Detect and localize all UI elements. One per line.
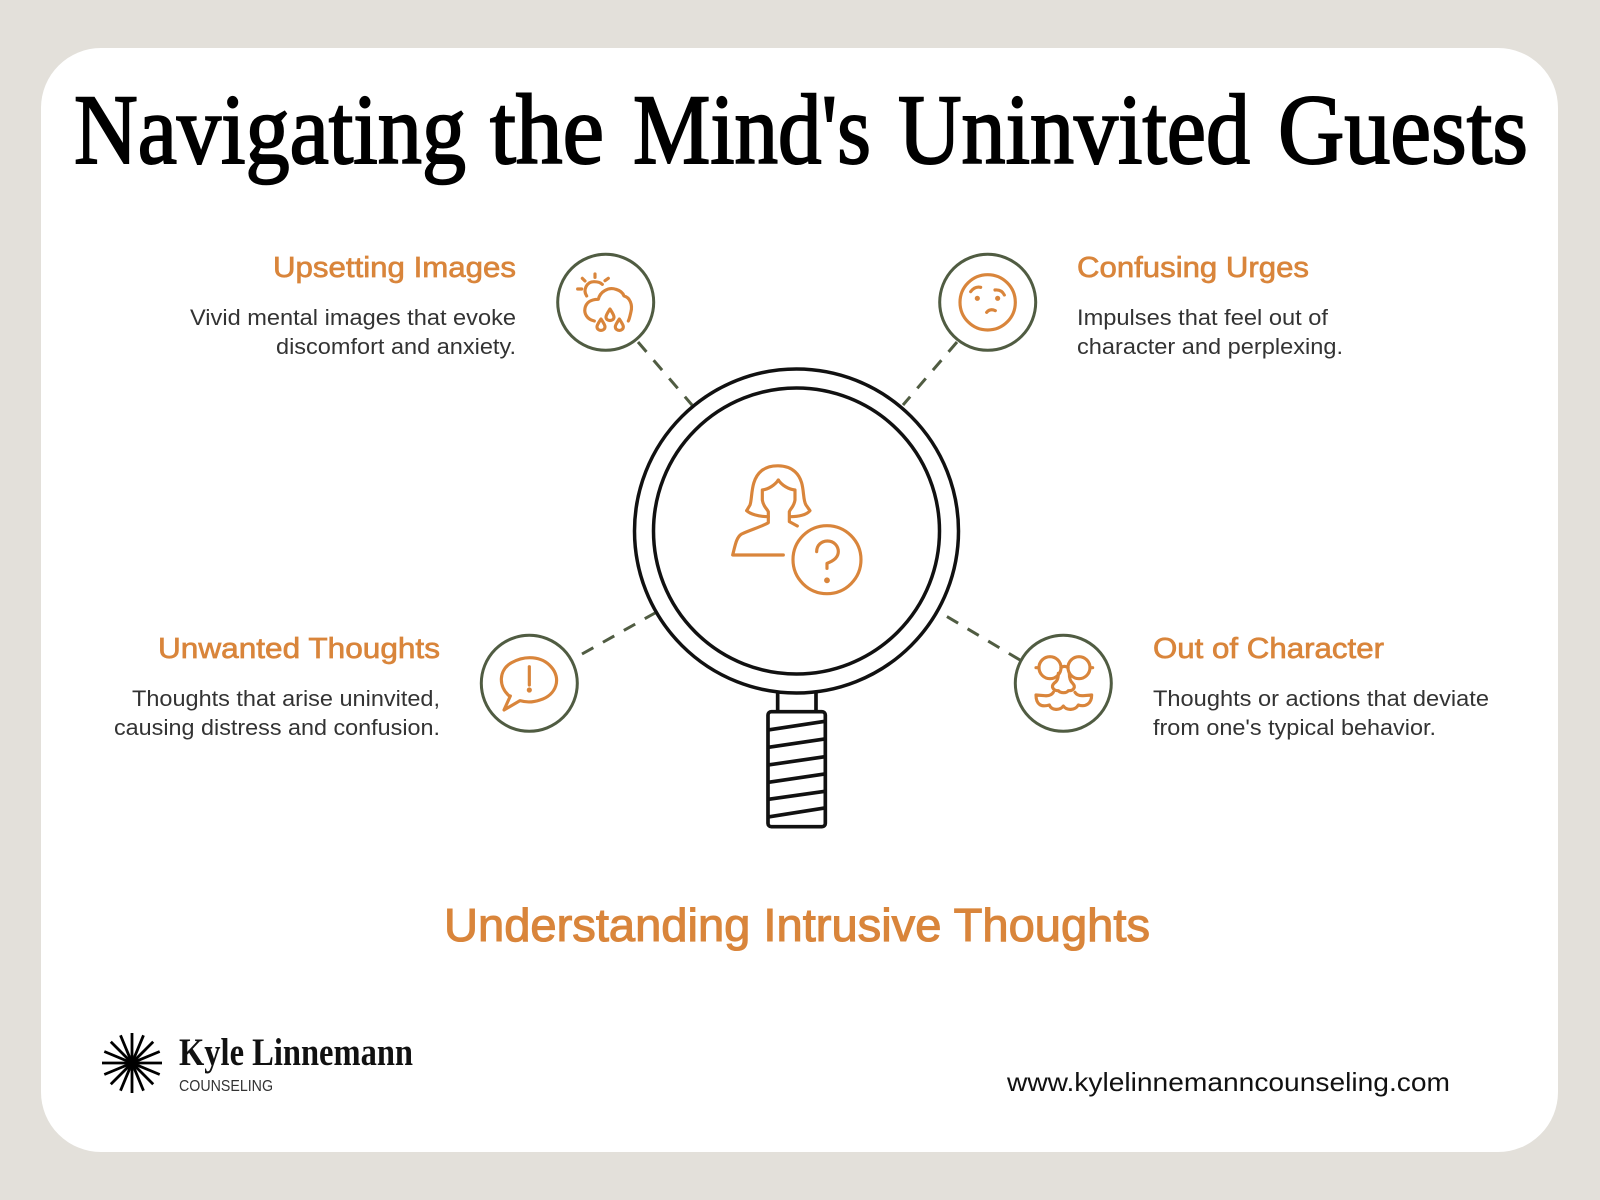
icon: confused face bbox=[940, 254, 1036, 350]
text: logo name: Kyle Linnemann bbox=[179, 1031, 413, 1074]
icon: sunburst bbox=[102, 1033, 162, 1093]
title: the bbox=[490, 74, 604, 185]
connector lines bbox=[582, 342, 1020, 660]
icon: person with question mark bbox=[733, 466, 861, 594]
icon: disguise glasses, nose and moustache bbox=[1015, 635, 1111, 731]
heading: confusing urges: Confusing Urges bbox=[1077, 252, 1309, 284]
text: confusing urges description: Impulses that feel out of bbox=[1077, 305, 1329, 330]
website url: www.kylelinnemanncounseling.com bbox=[1006, 1067, 1450, 1097]
icon: speech bubble with exclamation mark bbox=[481, 635, 577, 731]
text: confusing urges description: character and perplexing. bbox=[1077, 334, 1343, 359]
title: Guests bbox=[1278, 74, 1528, 185]
title bbox=[74, 74, 1528, 185]
panel: unwanted thoughts bbox=[114, 633, 577, 740]
text: upsetting images description: Vivid mental images that evoke bbox=[190, 305, 516, 330]
magnifying glass bbox=[634, 369, 958, 827]
icon: weather cloud bbox=[558, 254, 654, 350]
title: Mind's bbox=[633, 74, 871, 185]
panel: confusing urges bbox=[940, 252, 1343, 359]
text: unwanted thoughts description: Thoughts that arise uninvited, bbox=[132, 686, 440, 711]
heading: out of character: Out of Character bbox=[1153, 633, 1384, 665]
text: out of character description: from one's typical behavior. bbox=[1153, 715, 1436, 740]
text: unwanted thoughts description: causing distress and confusion. bbox=[114, 715, 440, 740]
text: out of character description bbox=[1153, 686, 1489, 740]
panel: out of character bbox=[1015, 633, 1489, 740]
heading: unwanted thoughts: Unwanted Thoughts bbox=[158, 633, 440, 665]
panel: upsetting images bbox=[190, 252, 654, 359]
title: Uninvited bbox=[898, 74, 1250, 185]
text: logo tagline: COUNSELING bbox=[179, 1078, 273, 1095]
title: Navigating bbox=[74, 74, 466, 185]
text: confusing urges description bbox=[1077, 305, 1343, 359]
heading: upsetting images: Upsetting Images bbox=[273, 252, 516, 284]
text: out of character description: Thoughts or actions that deviate bbox=[1153, 686, 1489, 711]
text: unwanted thoughts description bbox=[114, 686, 440, 740]
text: upsetting images description bbox=[190, 305, 516, 359]
logo bbox=[102, 1031, 413, 1095]
subtitle: Understanding Intrusive Thoughts bbox=[444, 899, 1150, 951]
text: upsetting images description: discomfort and anxiety. bbox=[276, 334, 516, 359]
